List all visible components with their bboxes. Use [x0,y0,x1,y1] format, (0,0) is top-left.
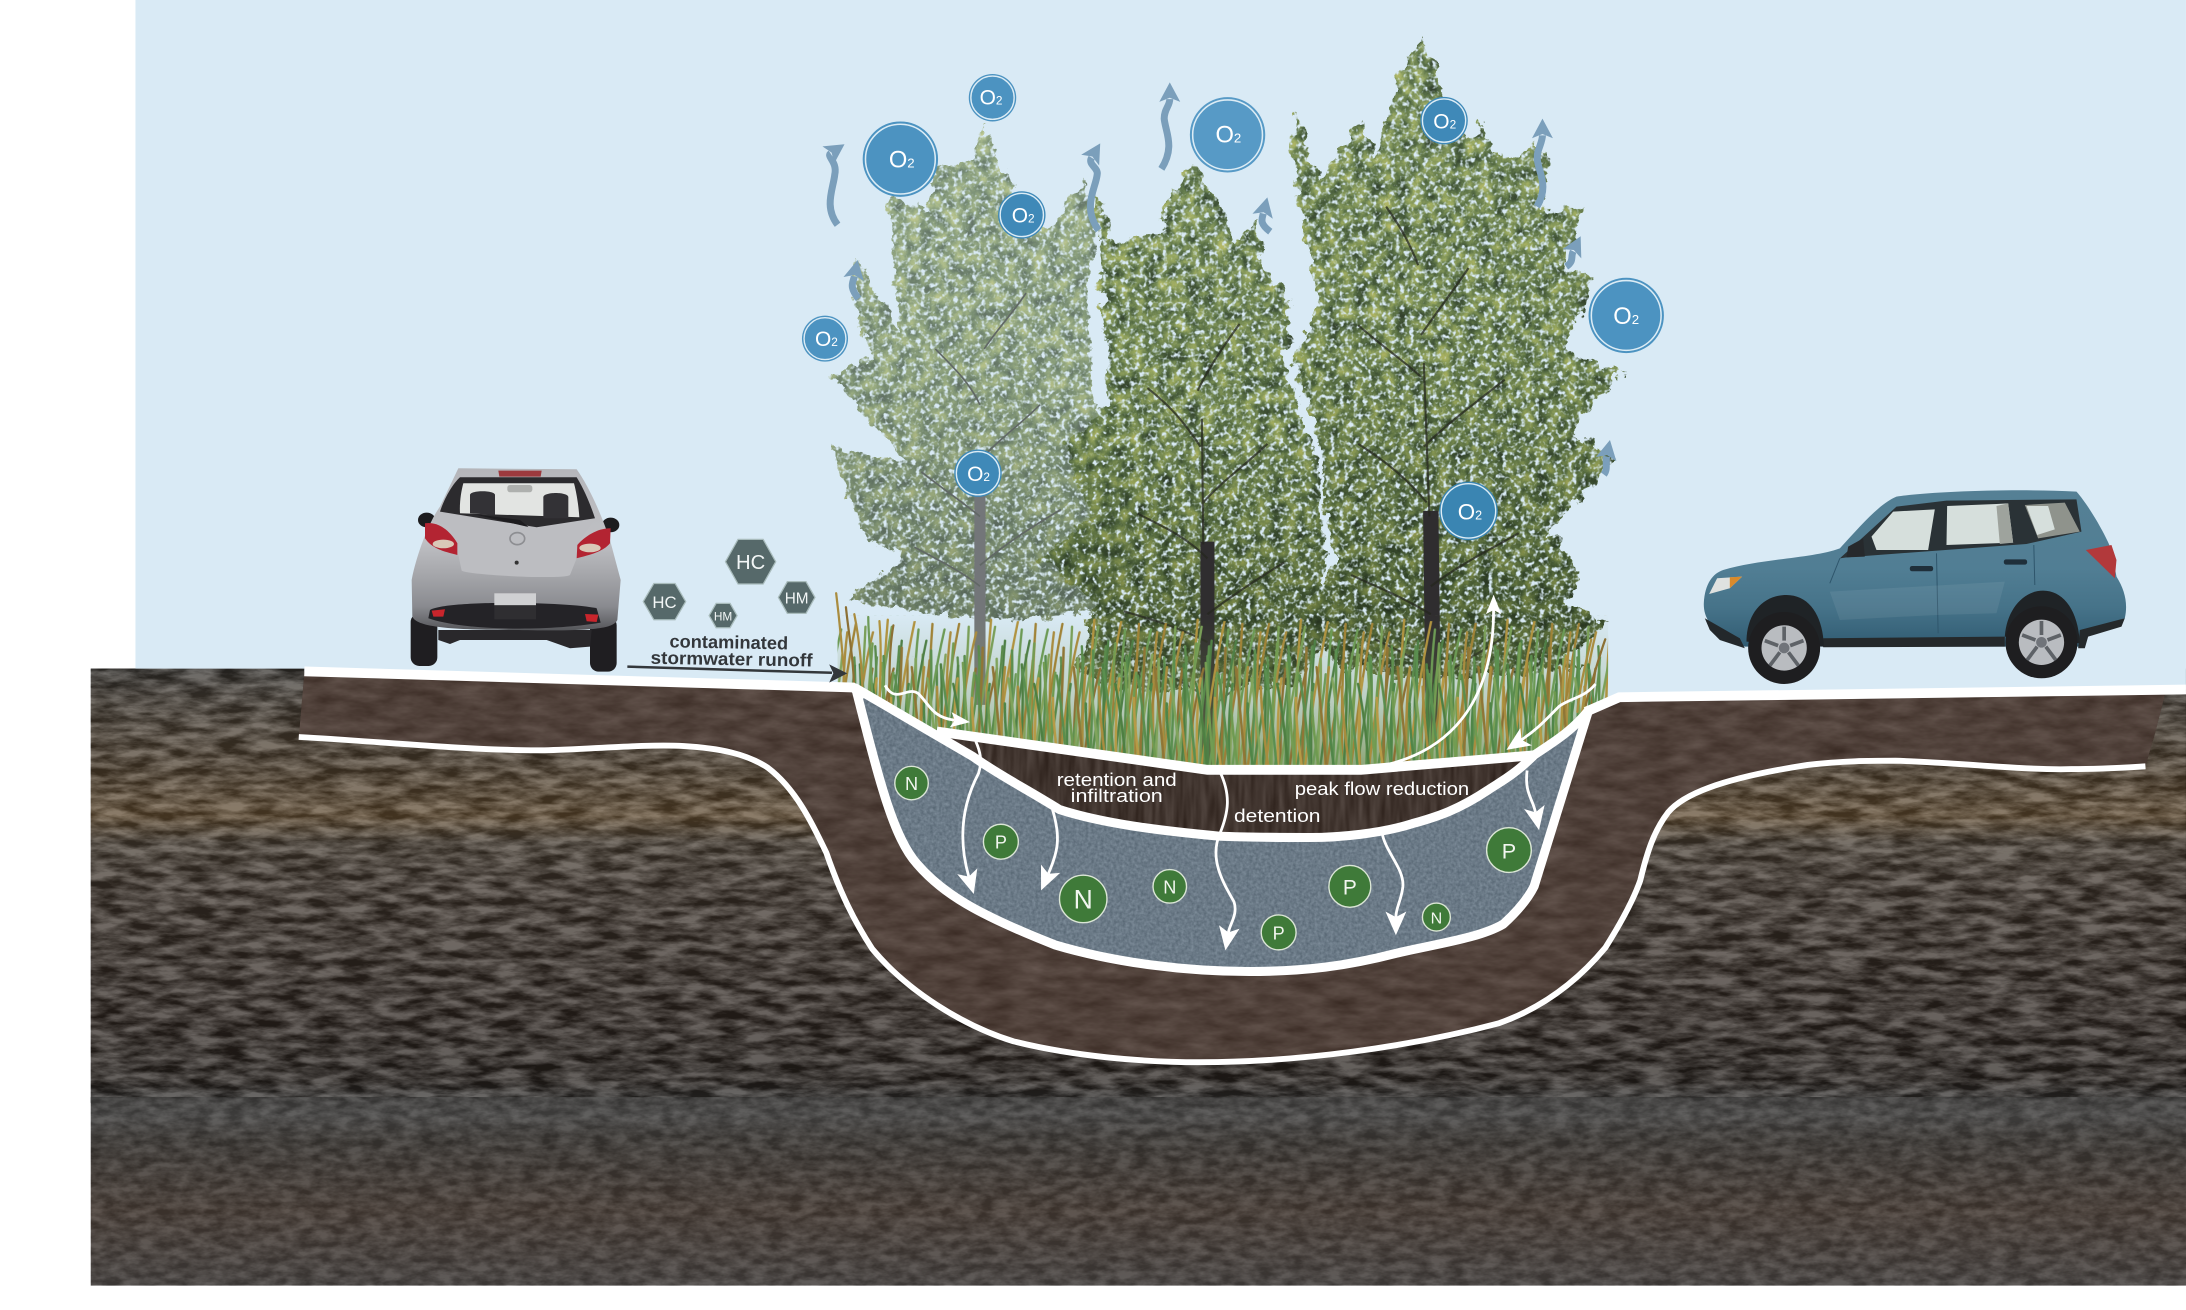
O2 bubble [1420,97,1468,144]
O2 bubble [802,316,848,362]
arrow: runoff to swale [627,664,847,683]
text: contaminated stormwater runoff: contaminated [669,631,788,653]
O2 bubble: O2 [1012,205,1035,228]
pollutant hexagon: HC large [725,539,776,584]
nutrient bubble N: N [1163,877,1176,897]
nutrient bubble P [983,824,1018,859]
compacted soil layer [299,671,2166,1062]
nutrient bubble N: N [905,774,918,794]
pollutant hexagon: HM small [709,603,737,628]
nutrient bubble P [1261,915,1296,950]
O2 bubble [863,121,938,197]
O2 bubble: O2 [1215,122,1241,148]
pollutant hexagon: HM medium: HM [785,590,809,607]
sky [135,0,2186,769]
nutrient bubble N small: N [1431,909,1442,927]
nutrient bubble N large [1059,875,1107,923]
basin: ponded detention zone [939,731,1535,851]
text: retention and infiltration: infiltration [1071,786,1163,806]
O2 bubble: O2 [1458,499,1482,524]
oxygen rising arrows [830,99,1607,475]
O2 bubble: O2 [967,463,990,486]
water flow arrows [885,610,1596,932]
gravel white outline [856,688,1589,972]
gravel layer [856,688,1589,972]
nutrient bubble P: P [995,833,1007,853]
nutrient bubble N large: N [1074,885,1093,915]
nutrient bubble N small [1422,903,1450,931]
O2 bubble: O2 [889,148,915,174]
text: contaminated stormwater runoff: stormwater runoff [650,648,814,671]
nutrient bubble P [1487,828,1531,872]
nutrient bubble P: P [1273,923,1285,943]
car: side view SUV [1704,490,2126,684]
text: peak flow reduction: peak flow reduction [1295,779,1469,799]
nutrient bubble P: P [1502,838,1516,863]
O2 bubble: O2 [815,328,838,351]
O2 bubble [1439,482,1498,540]
O2 bubble: O2 [1433,110,1456,133]
O2 bubble [969,74,1016,121]
pollutant hexagon: HC small [643,583,686,620]
O2 bubble: O2 [1613,304,1639,330]
text: retention and infiltration [1057,770,1177,806]
O2 bubble: O2 [980,87,1003,110]
tree right [1291,34,1623,747]
nutrient bubble P: P [1343,877,1357,900]
soil background: upper layers [91,669,2186,1103]
text: detention: detention [1234,806,1321,826]
nutrient bubble P [1329,865,1371,907]
O2 bubble [1190,97,1265,173]
nutrient bubble N [1153,870,1187,903]
pollutant hexagon: HM small: HM [714,609,732,623]
O2 bubble [998,191,1046,239]
nutrient bubble N [895,766,928,800]
pollutant hexagon: HM medium [778,582,815,613]
tree centre [1040,165,1326,771]
text: retention and infiltration: retention and [1057,770,1177,790]
pollutant hexagon: HC small: HC [652,593,677,612]
wetland grass [836,593,1608,780]
O2 bubble [954,449,1002,497]
car: rear view hatchback [411,468,621,672]
O2 bubble [1589,278,1664,353]
lower excavation white line [299,737,2145,1062]
soil background: lower layers [91,1097,2186,1286]
pollutant hexagon: HC large: HC [736,552,765,574]
text: contaminated stormwater runoff [650,631,814,671]
ground surface white line [304,671,2186,770]
tree left (faded) [831,124,1138,705]
